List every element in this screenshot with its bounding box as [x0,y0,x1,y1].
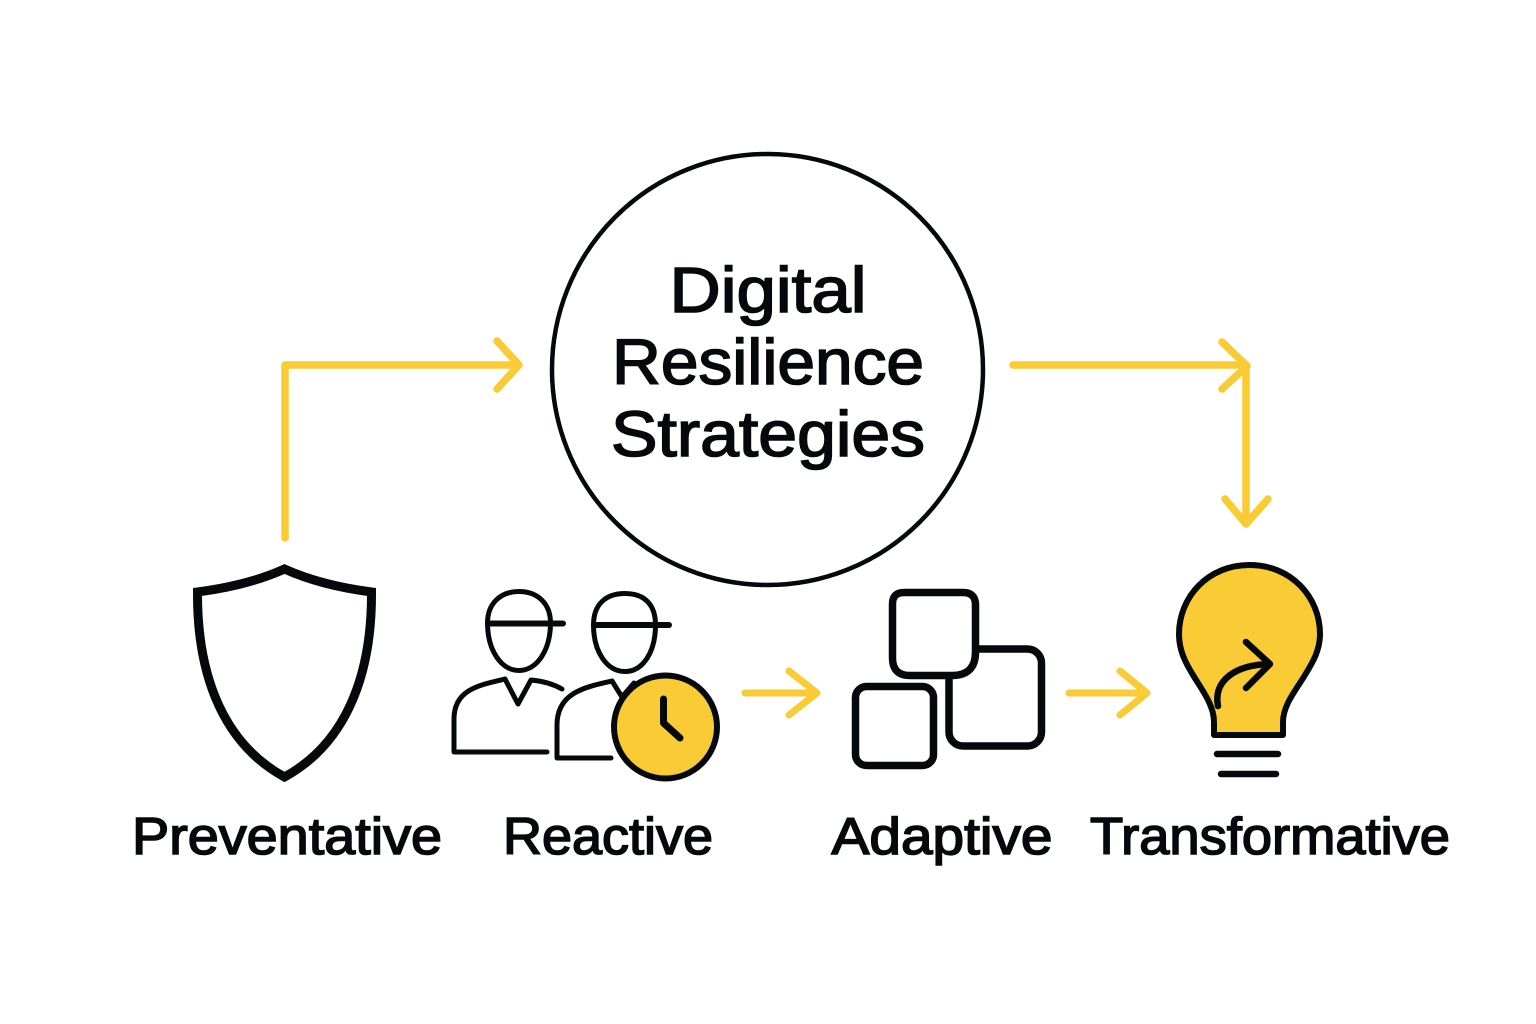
label: Preventative: Preventative [132,808,442,866]
arrow: centre to transformative [1013,342,1268,524]
arrow: reactive to adaptive [745,671,817,715]
arrow: adaptive to transformative [1069,671,1147,715]
label: Reactive: Reactive [503,808,713,866]
title: Digital Resilience Strategies: Digital [670,254,866,326]
label: Transformative: Transformative [1090,808,1450,866]
icon: shield [197,569,372,777]
title: Digital Resilience Strategies: Resilience [612,326,924,398]
bulb base lines [1217,754,1278,774]
icon: adaptive squares [856,592,1042,766]
bulb arrow [1217,642,1270,706]
icon: light bulb [1179,565,1320,774]
title: Digital Resilience Strategies [611,254,925,470]
title: Digital Resilience Strategies: Strategies [611,398,925,470]
central circle [552,154,983,585]
person one [454,592,563,752]
arrow: preventative to centre [285,341,519,538]
person two [557,594,669,758]
icon: reactive team with clock [454,592,717,778]
label: Adaptive: Adaptive [832,808,1052,866]
clock [614,676,717,778]
